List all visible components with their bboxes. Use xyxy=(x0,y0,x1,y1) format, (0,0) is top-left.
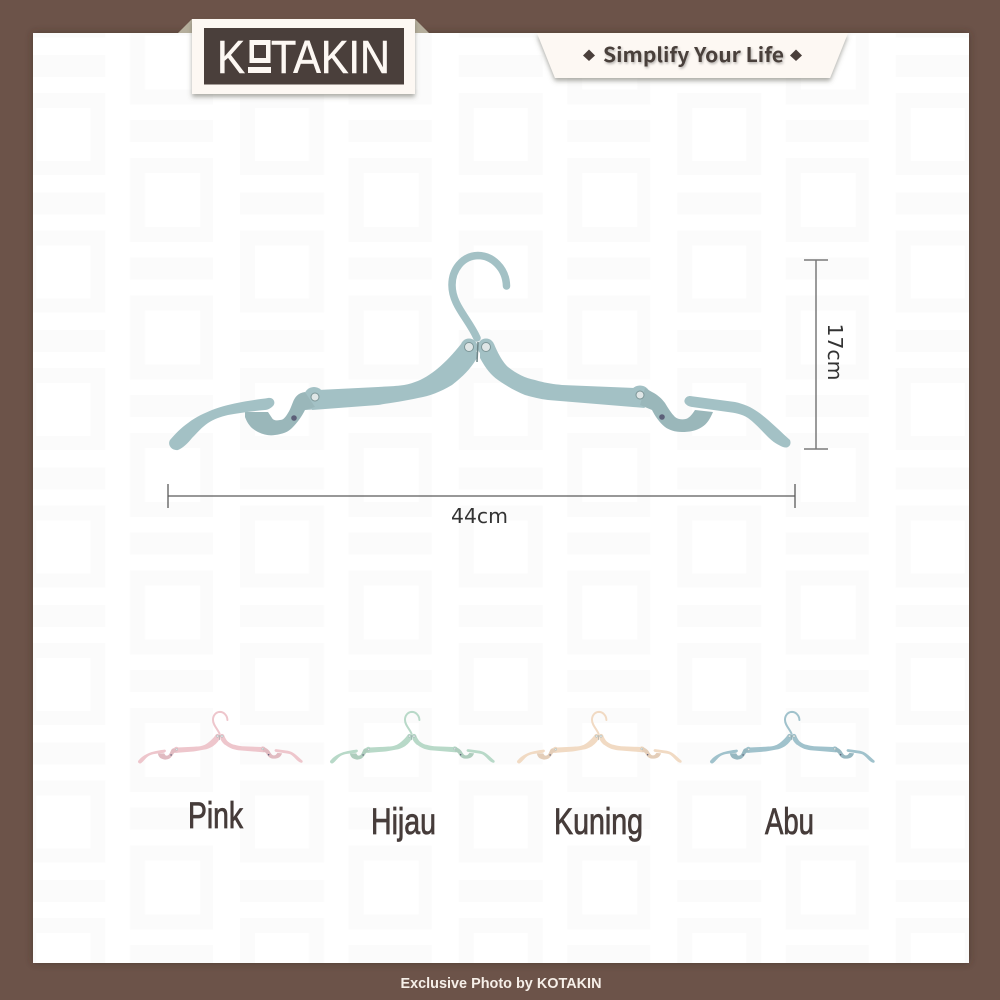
tagline text: Simplify Your Life xyxy=(603,39,784,68)
colour option: grey xyxy=(710,712,875,842)
left diamond xyxy=(583,50,595,61)
ribbon shape xyxy=(537,33,848,78)
logo wordmark: K xyxy=(217,31,245,83)
right diamond xyxy=(790,50,802,61)
logo fold left xyxy=(178,19,192,33)
pink hanger xyxy=(138,712,303,763)
colour option: green xyxy=(330,712,495,842)
logo plate xyxy=(204,28,404,84)
colour option: yellow xyxy=(517,712,682,842)
pink label: Pink xyxy=(188,795,243,836)
green hanger xyxy=(330,712,495,763)
main hanger xyxy=(169,256,791,450)
grey hanger xyxy=(710,712,875,763)
height label: 17cm xyxy=(823,323,847,381)
footer credit: Exclusive Photo by KOTAKIN xyxy=(400,976,602,992)
width label: 44cm xyxy=(451,504,508,528)
logo ribbon xyxy=(178,19,429,94)
green label: Hijau xyxy=(371,801,436,842)
height dimension line xyxy=(804,260,828,449)
yellow label: Kuning xyxy=(554,801,643,842)
logo fold right xyxy=(415,19,429,33)
yellow hanger xyxy=(517,712,682,763)
logo wordmark xyxy=(217,31,390,83)
logo card xyxy=(192,19,415,94)
colour option: pink xyxy=(138,712,303,836)
width dimension line xyxy=(168,484,795,508)
tagline ribbon xyxy=(537,33,848,78)
logo wordmark: TAKIN xyxy=(271,31,390,83)
grey label: Abu xyxy=(765,801,814,842)
